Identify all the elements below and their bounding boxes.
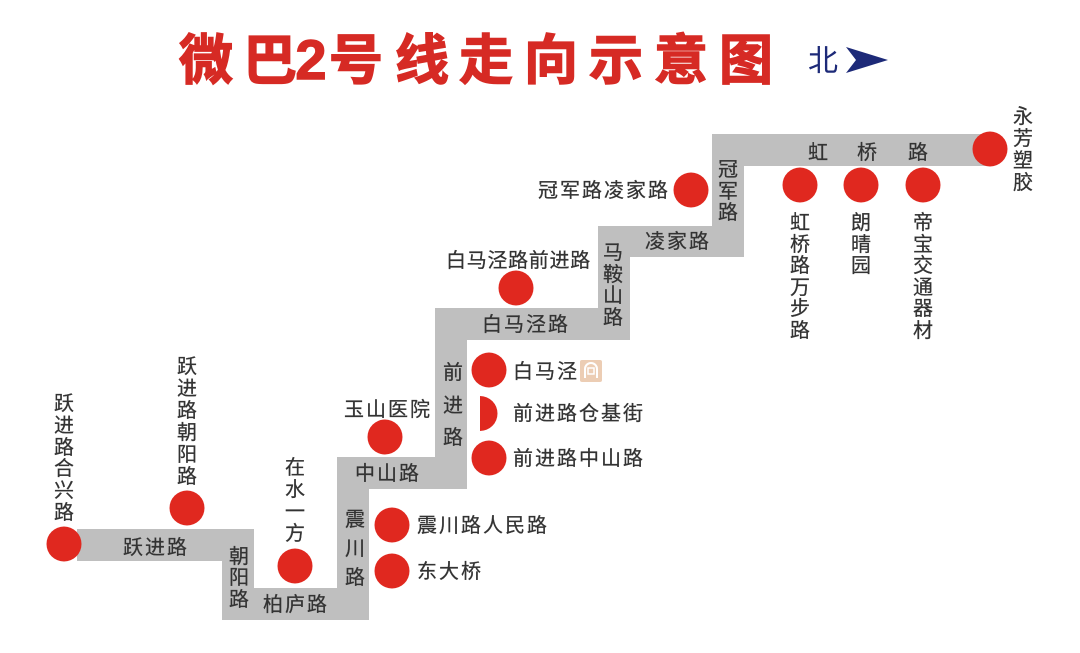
title: 微 — [179, 31, 233, 91]
station labels: 宝 — [913, 233, 933, 256]
title: 向 — [524, 31, 578, 91]
road names: 路 — [229, 588, 249, 611]
station labels: 路 — [177, 465, 197, 488]
station labels: 震川路人民路 — [417, 514, 549, 537]
title: 号 — [329, 31, 383, 91]
road names: 白马泾路 — [482, 313, 570, 336]
road names: 冠 — [718, 159, 738, 181]
road names: 路 — [345, 566, 365, 589]
station labels: 帝 — [913, 211, 933, 234]
title — [179, 28, 773, 91]
stations — [46, 132, 1008, 588]
station labels: 进 — [54, 414, 74, 437]
station labels: 芳 — [1013, 127, 1033, 150]
title: 示 — [589, 31, 643, 91]
road names: 鞍 — [603, 263, 623, 286]
station labels: 晴 — [851, 233, 871, 256]
road names: 中山路 — [355, 462, 421, 485]
title: 巴 — [243, 31, 297, 91]
station labels: 路 — [177, 399, 197, 422]
road names — [123, 141, 928, 616]
station labels: 器 — [913, 298, 933, 320]
station labels: 方 — [285, 522, 305, 545]
north indicator — [808, 45, 888, 78]
title: 意 — [654, 31, 708, 91]
station labels: 东大桥 — [417, 560, 483, 583]
station labels: 白马泾路前进路 — [446, 249, 591, 272]
station labels: 胶 — [1013, 171, 1033, 194]
road names: 柏庐路 — [263, 593, 329, 616]
north indicator: 北 — [808, 45, 838, 78]
title: 线 — [395, 31, 449, 91]
station labels: 冠军路凌家路 — [538, 179, 670, 202]
station labels: 路 — [790, 254, 810, 277]
station labels: 塑 — [1013, 149, 1033, 172]
station labels: 一 — [285, 501, 305, 523]
station labels: 桥 — [790, 233, 810, 256]
road names: 跃进路 — [123, 536, 189, 559]
station labels: 永 — [1013, 105, 1033, 128]
station labels: 材 — [913, 319, 933, 342]
station labels: 虹 — [790, 211, 810, 234]
road names: 路 — [908, 141, 928, 164]
road names: 虹 — [808, 141, 828, 164]
station labels: 合 — [54, 457, 74, 480]
road names: 路 — [443, 426, 463, 449]
road names: 马 — [603, 242, 623, 264]
road names: 山 — [603, 284, 623, 307]
road names: 军 — [718, 181, 738, 203]
station labels: 路 — [54, 501, 74, 524]
station labels: 路 — [790, 319, 810, 342]
station labels — [54, 105, 1033, 583]
station labels: 步 — [790, 297, 810, 320]
station labels: 玉山医院 — [344, 398, 432, 421]
station labels: 跃 — [54, 392, 74, 415]
road names: 阳 — [229, 566, 249, 589]
station labels: 园 — [851, 255, 871, 277]
road names: 凌家路 — [645, 230, 711, 253]
station labels: 前进路仓基街 — [513, 402, 645, 425]
title: 2 — [295, 28, 327, 91]
station labels: 交 — [913, 254, 933, 277]
station labels: 万 — [790, 277, 810, 299]
road names: 震 — [345, 509, 365, 531]
station labels: 在 — [285, 456, 305, 479]
icon: metro — [580, 360, 602, 382]
station labels: 兴 — [54, 479, 74, 502]
road names: 桥 — [857, 141, 877, 164]
title: 走 — [459, 31, 513, 91]
road names: 路 — [603, 306, 623, 329]
road names: 进 — [443, 394, 463, 417]
road names: 朝 — [229, 545, 249, 568]
station labels: 朗 — [851, 211, 871, 234]
route line — [77, 134, 990, 620]
station labels: 通 — [913, 276, 933, 299]
road names: 川 — [345, 538, 365, 560]
station labels: 阳 — [177, 443, 197, 466]
road names: 路 — [718, 201, 738, 224]
title: 图 — [719, 31, 773, 91]
station labels: 进 — [177, 377, 197, 400]
station labels: 路 — [54, 436, 74, 459]
station labels: 跃 — [177, 355, 197, 378]
road names: 前 — [443, 361, 463, 384]
station labels: 白马泾 — [513, 360, 579, 383]
station labels: 朝 — [177, 421, 197, 444]
station labels: 水 — [285, 478, 305, 501]
station labels: 前进路中山路 — [513, 447, 645, 470]
